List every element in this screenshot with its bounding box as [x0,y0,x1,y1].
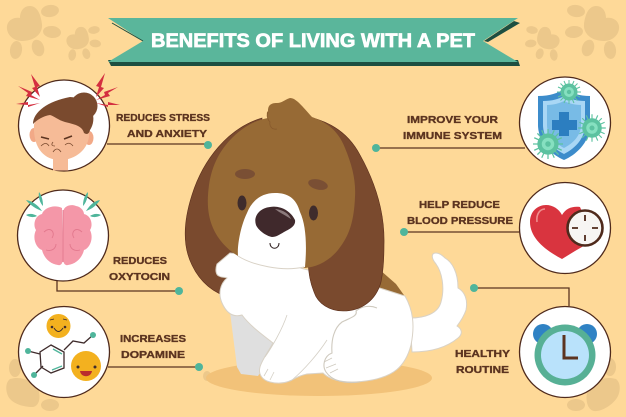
icon: small smiley [46,314,70,338]
label: HEALTHY [455,348,510,360]
back leg shade [230,310,280,376]
tuft curl [267,112,277,129]
haunch [324,306,377,383]
panel: immune system: IMMUNE SYSTEM [403,130,502,142]
panel: increases dopamine: DOPAMINE [121,349,185,361]
icon: big smiley [71,351,101,381]
title banner [108,18,520,66]
brows [235,169,255,179]
title text: BENEFITS OF LIVING WITH A PET [151,31,475,52]
panel: healthy routine: ROUTINE [456,364,509,376]
icon: heart [530,205,594,259]
icon: molecule [25,332,96,378]
icon: stress bolts [16,73,120,107]
panel: reduces stress [16,73,210,171]
left ear [185,118,262,298]
panel: reduces stress: AND ANXIETY [127,128,207,140]
panel: reduces oxytocin [18,190,170,283]
label: IMPROVE YOUR [407,114,498,126]
right ear [308,118,384,311]
icon: shield [538,89,590,160]
saddle [376,270,406,298]
nose [255,207,295,237]
icon: alarm clock [533,324,597,386]
connector lines [57,144,569,367]
snout [238,193,306,270]
icon: green rays [26,192,101,217]
label: INCREASES [120,333,186,345]
panel: blood pressure [407,182,610,274]
eyes [238,196,246,210]
connector dots [175,141,478,371]
panel: increases dopamine [18,306,186,398]
panel: immune system [403,77,610,168]
panel: healthy routine [455,306,610,398]
mouth [270,243,279,248]
tail [410,253,467,352]
head [208,98,355,268]
front leg lines [264,315,327,380]
dog illustration [185,98,467,396]
icon: woman face [30,92,98,170]
ground shadow [206,360,432,396]
label: REDUCES [113,255,167,267]
panel: blood pressure: BLOOD PRESSURE [407,215,513,227]
icon: viruses [557,80,581,104]
label: HELP REDUCE [419,199,500,211]
icon: gauge [568,210,602,246]
panel: reduces oxytocin: OXYTOCIN [109,271,170,283]
icon: brain [34,205,92,265]
label: REDUCES STRESS [116,112,210,124]
body and chest [216,253,413,383]
